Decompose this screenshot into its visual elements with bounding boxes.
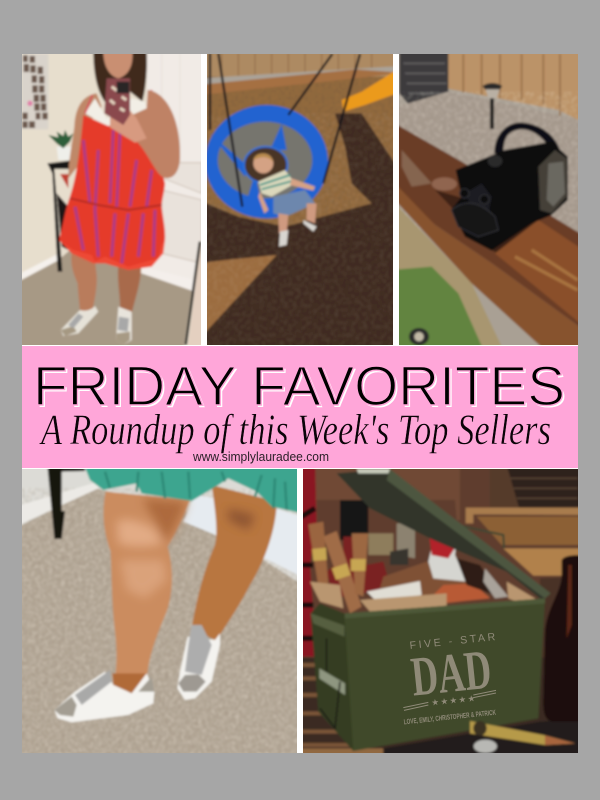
banner: pink title panel — [22, 346, 578, 468]
photo: toddler on blue saucer swing — [207, 54, 393, 345]
open lid — [337, 469, 550, 600]
bottle cap — [474, 740, 497, 753]
carpet — [15, 250, 192, 350]
wood shelves — [466, 508, 587, 523]
legs — [71, 253, 97, 313]
timber beam side face — [399, 187, 578, 345]
soap bubble — [432, 177, 457, 191]
hand — [110, 108, 147, 143]
toddler — [253, 153, 273, 173]
photo: black bubble machine on timber — [399, 54, 578, 345]
photo: five-star dad ammo box gift set — [293, 458, 587, 762]
photo wall collage — [22, 54, 48, 129]
right shoulder and arm — [128, 90, 180, 178]
hair — [93, 52, 147, 107]
website url: www.simplylauradee.com — [192, 449, 329, 464]
baseboard — [15, 482, 98, 527]
engraved text: five star dad: LOVE, EMILY, CHRISTOPHER & PATRICK — [403, 708, 497, 726]
brass bullet opener — [470, 721, 575, 745]
photo: white glitter sneakers on carpet — [22, 469, 297, 753]
wall — [22, 469, 297, 582]
timber beam top face — [399, 124, 578, 328]
leg shading — [117, 498, 187, 598]
engraved text: five star dad — [403, 631, 500, 726]
table leg — [47, 465, 85, 539]
title: friday favorites: FRIDAY FAVORITES — [33, 354, 565, 417]
river rocks — [399, 90, 577, 220]
solar light — [482, 83, 502, 89]
teal ruffled skirt — [83, 463, 308, 513]
photo: woman in red striped dress mirror selfie — [22, 54, 201, 345]
phone with leopard case — [104, 78, 130, 125]
sneakers — [61, 306, 98, 336]
blue swing ring — [205, 105, 328, 218]
gift food and shredded paper — [373, 562, 490, 612]
ammo box body — [344, 598, 545, 751]
mirror edge — [188, 248, 201, 345]
black side table — [47, 161, 70, 272]
left leg — [104, 492, 190, 693]
back sneaker — [177, 633, 220, 700]
baseboard — [22, 254, 58, 282]
engraved text: five star dad: ★★★★★ — [431, 693, 477, 708]
right wall — [183, 495, 308, 580]
left shoulder and arm — [68, 93, 102, 178]
face — [103, 52, 132, 78]
shadow on mulch — [207, 112, 393, 345]
potted plant — [57, 147, 72, 160]
lace top — [85, 98, 148, 127]
bubble machine — [494, 123, 562, 157]
engraved text: five star dad: DAD — [408, 639, 494, 709]
red plaid fabric — [293, 458, 317, 657]
swing ropes — [210, 53, 360, 207]
striped dress — [59, 114, 165, 270]
fence — [447, 54, 578, 120]
front sneaker — [54, 672, 154, 722]
bottle, cigars and gift contents — [340, 500, 368, 540]
wood table — [293, 658, 587, 762]
carpet — [22, 488, 297, 753]
wooden fence — [207, 54, 393, 78]
wood wall — [293, 458, 587, 762]
engraved text: five star dad: FIVE - STAR — [409, 631, 500, 652]
dirt and grass — [399, 207, 502, 345]
gravel strip and border — [207, 66, 393, 86]
swing mesh — [218, 122, 312, 198]
title shadow: friday favorites: FRIDAY FAVORITES — [35, 356, 567, 419]
beer bottle — [543, 555, 587, 722]
yellow slide — [340, 70, 393, 112]
right leg — [192, 485, 277, 640]
dark slatted structure — [399, 54, 450, 104]
wicker basket — [507, 465, 587, 511]
